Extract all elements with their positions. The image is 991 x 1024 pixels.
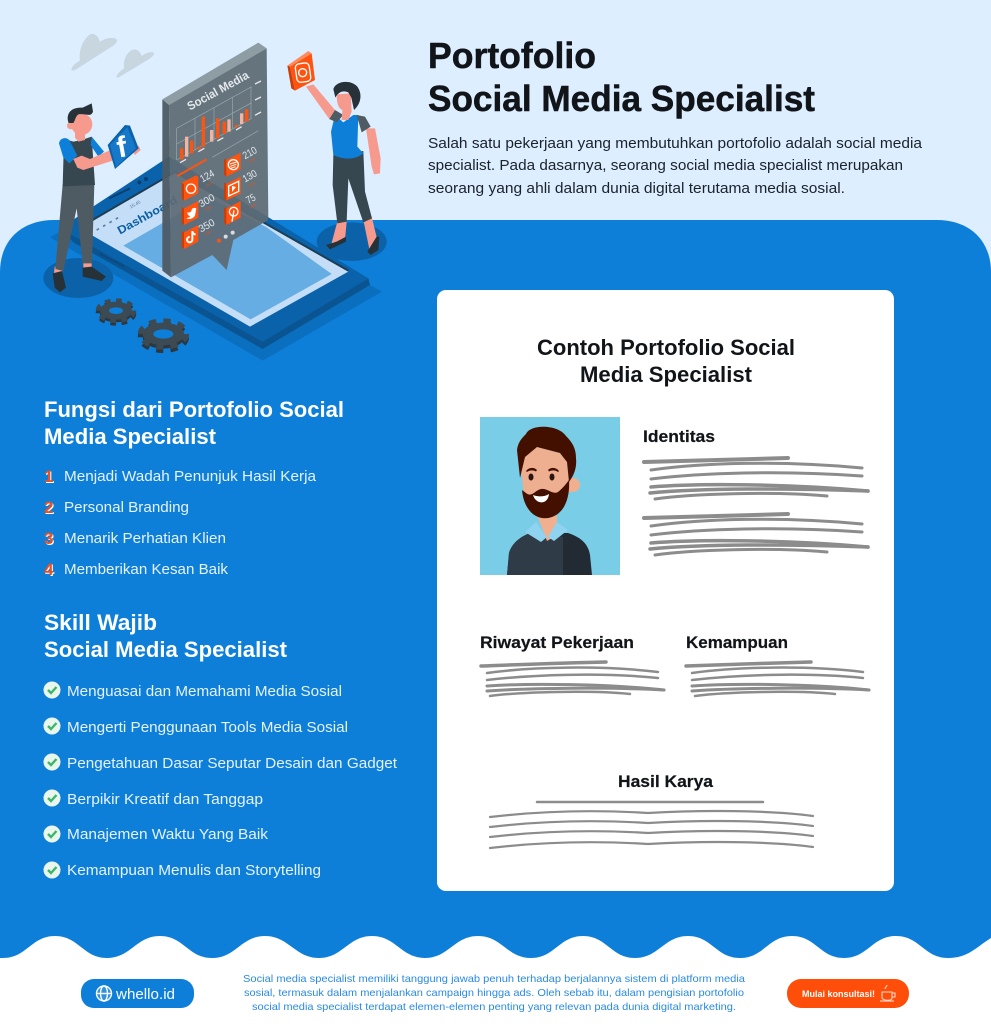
panel: functions heading <box>44 397 344 449</box>
panel: skills heading <box>44 610 288 662</box>
panel: functions heading: Media Specialist <box>44 424 217 449</box>
phone <box>50 157 382 361</box>
checklist: skills: Berpikir Kreatif dan Tanggap <box>67 791 263 808</box>
icon: whatsapp tile <box>182 175 198 201</box>
accent line <box>177 159 207 176</box>
platform percentages: 50% <box>204 205 213 212</box>
footer paragraph: sosial, termasuk dalam menjalankan campaign hingga ads. Oleh sebab itu, dalam pengisian portofolio <box>244 987 744 999</box>
platform percentages: 25% <box>205 181 214 188</box>
card heading: Media Specialist <box>580 362 753 387</box>
title: Portofolio <box>428 35 596 76</box>
numbered list: functions: 2 <box>45 499 54 518</box>
icon: facebook tile: f <box>114 130 130 165</box>
footer paragraph: social media specialist terdapat elemen-elemen penting yang relevan pada dunia digital marketing. <box>252 1001 736 1013</box>
card heading: Contoh Portofolio Social <box>537 335 795 360</box>
numbered list: functions: Menjadi Wadah Penunjuk Hasil Kerja <box>64 468 317 485</box>
numbered list: functions <box>44 467 317 580</box>
section: riwayat pekerjaan <box>480 633 664 696</box>
intro paragraph: Salah satu pekerjaan yang membutuhkan portofolio adalah social media <box>428 135 923 152</box>
platform numbers: 210 <box>241 145 259 162</box>
intro paragraph <box>428 135 923 197</box>
numbered list: functions: 2 <box>44 498 53 517</box>
numbered list: functions: 1 <box>45 468 54 487</box>
status bar: 15:45 <box>129 199 142 210</box>
numbered list: functions: Memberikan Kesan Baik <box>64 561 229 578</box>
section: identitas: Identitas <box>643 427 715 446</box>
checklist: skills: Pengetahuan Dasar Seputar Desain dan Gadget <box>67 755 398 772</box>
numbered list: functions: Personal Branding <box>64 499 189 516</box>
icon: twitter tile <box>182 201 198 225</box>
icon: instagram tile <box>287 51 315 91</box>
numbered list: functions: Menarik Perhatian Klien <box>64 530 226 547</box>
illustration: social media dashboard with two people <box>43 34 387 361</box>
numbered list: functions: 1 <box>44 467 53 486</box>
icon: spotify tile <box>224 153 241 177</box>
button: whello.id brand pill: whello.id <box>115 986 175 1003</box>
checklist: skills <box>44 682 398 879</box>
numbered list: functions: 4 <box>44 560 54 579</box>
intro paragraph: seorang yang ahli dalam dunia digital terutama media sosial. <box>428 180 845 197</box>
platform numbers: 130 <box>241 168 259 185</box>
phone screen <box>80 172 348 327</box>
platform percentages: 30% <box>248 157 257 164</box>
numbered list: functions: 4 <box>45 561 55 580</box>
button: consultation: Mulai konsultasi! <box>802 989 875 1000</box>
icon: pinterest tile <box>224 201 241 225</box>
section: hasil karya <box>490 772 813 848</box>
footer paragraph: Social media specialist memiliki tanggung jawab penuh terhadap berjalannya sistem di platform media <box>243 973 745 985</box>
section: identitas <box>643 427 868 555</box>
intro paragraph: specialist. Pada dasarnya, seorang social media specialist merupakan <box>428 157 903 174</box>
person: woman with instagram tile <box>287 51 387 261</box>
button: whello.id brand pill <box>81 979 194 1008</box>
checklist: skills: Manajemen Waktu Yang Baik <box>67 826 269 843</box>
pagination dots <box>217 239 221 243</box>
person: man with facebook tile <box>43 103 141 298</box>
panel: portfolio example card <box>437 290 894 891</box>
bar chart <box>177 81 261 163</box>
title <box>428 35 815 119</box>
icon: clouds <box>71 34 154 78</box>
panel: skills heading: Social Media Specialist <box>44 637 288 662</box>
platform percentages <box>204 157 258 237</box>
icon: youtube tile <box>224 177 241 201</box>
platform numbers: 300 <box>197 192 217 210</box>
icon: coffee cup <box>880 985 895 1001</box>
icon: globe <box>96 986 112 1001</box>
icon: check marks <box>44 682 60 878</box>
numbered list: functions: 3 <box>45 530 54 549</box>
board: social media stats <box>162 43 268 277</box>
panel: functions heading: Fungsi dari Portofolio Social <box>44 397 344 422</box>
checklist: skills: Mengerti Penggunaan Tools Media Sosial <box>67 719 348 736</box>
phone speaker <box>110 189 129 198</box>
board title: Social Media <box>185 68 251 113</box>
button: consultation <box>787 979 909 1008</box>
icon: tiktok tile <box>182 225 198 249</box>
icon: facebook tile <box>108 125 139 169</box>
checklist: skills: Kemampuan Menulis dan Storytelling <box>67 862 321 879</box>
section: kemampuan: Kemampuan <box>686 633 788 652</box>
platform numbers <box>197 145 259 235</box>
footer paragraph <box>243 973 745 1013</box>
icon: gears <box>98 301 186 350</box>
platform percentages: 25% <box>248 181 257 188</box>
platform numbers: 124 <box>198 168 217 185</box>
section: hasil karya: Hasil Karya <box>618 772 714 791</box>
card heading <box>537 335 795 387</box>
platform numbers: 350 <box>197 217 217 235</box>
section: riwayat pekerjaan: Riwayat Pekerjaan <box>480 633 634 652</box>
platform numbers: 75 <box>244 192 258 207</box>
platform percentages: 50% <box>204 229 213 237</box>
dashboard label: Dashboard <box>116 194 180 237</box>
section: kemampuan <box>686 633 869 696</box>
avatar photo <box>480 417 620 575</box>
title: Social Media Specialist <box>428 78 815 119</box>
numbered list: functions: 3 <box>44 529 53 548</box>
platform percentages: 50% <box>249 202 258 210</box>
blue main panel with wavy bottom <box>0 220 991 958</box>
checklist: skills: Menguasai dan Memahami Media Sosial <box>67 683 342 700</box>
panel: skills heading: Skill Wajib <box>44 610 157 635</box>
